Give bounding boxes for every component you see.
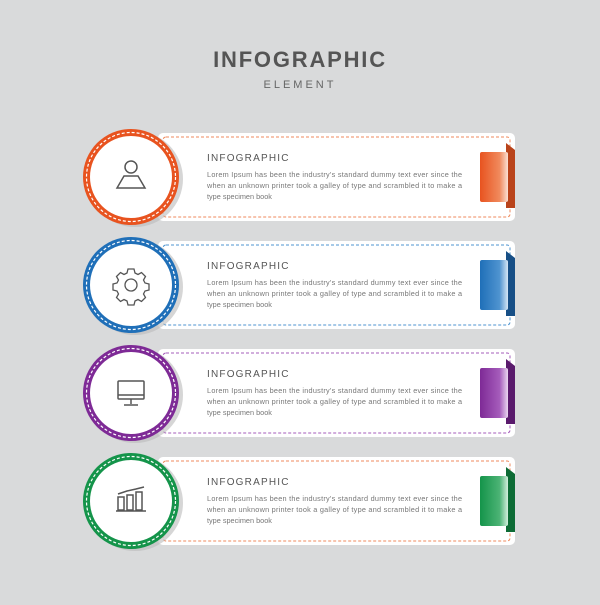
card 2: INFOGRAPHIC (207, 261, 290, 272)
icon: person (117, 161, 145, 188)
row 3 (83, 345, 515, 443)
icon: bar chart (116, 487, 146, 511)
icon: gear (113, 269, 149, 305)
circle 2 (83, 237, 183, 335)
card 3: type specimen book (207, 408, 272, 417)
card 4: INFOGRAPHIC (207, 477, 290, 488)
card 4: when an unknown printer took a galley of type and scrambled it to make a (206, 505, 463, 514)
card 4: Lorem Ipsum has been the industry's standard dummy text ever since the (207, 494, 462, 503)
tab 1 (480, 143, 515, 208)
tab 4 (480, 467, 515, 532)
row 4 (83, 453, 515, 551)
card 4 (158, 457, 515, 545)
icon: monitor (118, 381, 144, 405)
circle 1 (83, 129, 183, 227)
tab 3 (480, 359, 515, 424)
card 2: type specimen book (207, 300, 272, 309)
card 1: type specimen book (207, 192, 272, 201)
card 4: type specimen book (207, 516, 272, 525)
card 3 (158, 349, 515, 437)
card 1: when an unknown printer took a galley of type and scrambled it to make a (206, 181, 463, 190)
card 3: Lorem Ipsum has been the industry's standard dummy text ever since the (207, 386, 462, 395)
tab 2 (480, 251, 515, 316)
card 3: INFOGRAPHIC (207, 369, 290, 380)
row 2 (83, 237, 515, 335)
card 1: INFOGRAPHIC (207, 153, 290, 164)
card 2: Lorem Ipsum has been the industry's standard dummy text ever since the (207, 278, 462, 287)
circle 4 (83, 453, 183, 551)
card 1 (158, 133, 515, 221)
circle 3 (83, 345, 183, 443)
title: INFOGRAPHIC (213, 47, 387, 72)
card 2: when an unknown printer took a galley of type and scrambled it to make a (206, 289, 463, 298)
card 2 (158, 241, 515, 329)
card 3: when an unknown printer took a galley of type and scrambled it to make a (206, 397, 463, 406)
row 1 (83, 129, 515, 227)
subtitle: ELEMENT (264, 79, 336, 91)
card 1: Lorem Ipsum has been the industry's standard dummy text ever since the (207, 170, 462, 179)
